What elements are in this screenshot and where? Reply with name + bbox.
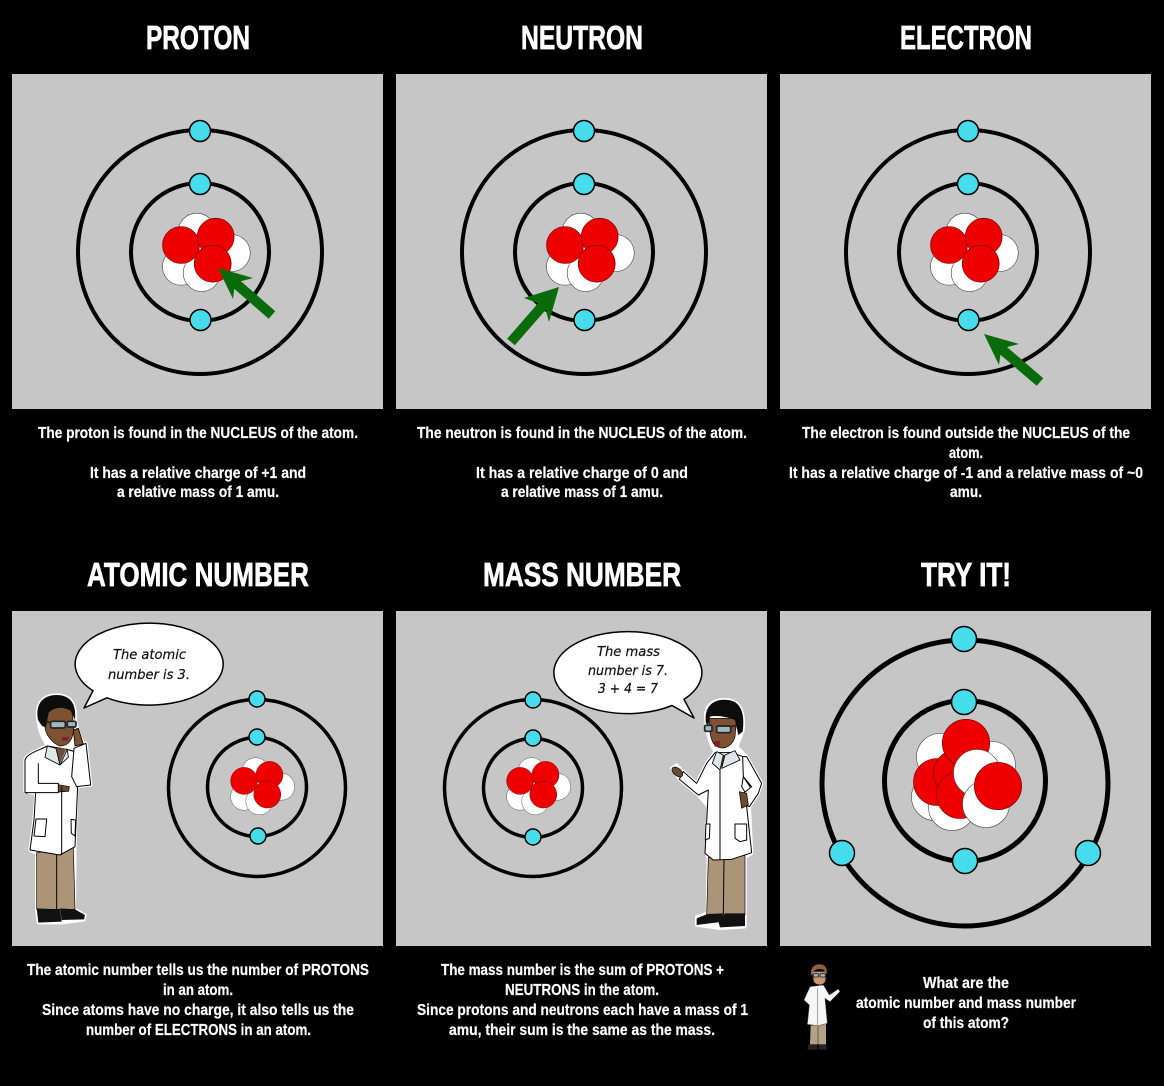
heading: neutron: NEUTRON <box>521 19 643 56</box>
text block: Since atoms have no charge, it also tells us the <box>42 1002 354 1019</box>
character: small scientist <box>804 964 840 1050</box>
text block: in an atom. <box>163 982 233 999</box>
speech bubble: The atomic <box>113 648 186 663</box>
illustration background <box>396 611 767 946</box>
text block: The proton is found in the NUCLEUS of the atom. <box>38 425 358 442</box>
atom diagram <box>462 120 706 374</box>
panel: electron <box>780 19 1151 501</box>
atom diagram <box>822 626 1108 926</box>
atom diagram <box>168 691 346 876</box>
character: scientist on the right <box>670 700 762 928</box>
text block <box>27 962 369 1039</box>
panel: mass number <box>396 556 767 1039</box>
atom diagram <box>846 120 1090 374</box>
heading: atomic number: ATOMIC NUMBER <box>87 556 309 593</box>
text block: The neutron is found in the NUCLEUS of the atom. <box>417 425 747 442</box>
speech bubble: The mass <box>597 645 660 660</box>
panel: proton <box>12 19 383 501</box>
text block: The atomic number tells us the number of PROTONS <box>27 962 369 979</box>
panel: try it <box>780 556 1151 1050</box>
arrow: points to neutron <box>507 287 559 345</box>
atom diagram <box>444 692 622 876</box>
panel: neutron <box>396 19 767 501</box>
text block <box>417 425 747 501</box>
text block <box>417 962 748 1039</box>
text block: Since protons and neutrons each have a mass of 1 <box>417 1002 748 1019</box>
text block: It has a relative charge of +1 and <box>90 465 306 482</box>
heading: mass number: MASS NUMBER <box>483 556 681 593</box>
question text: of this atom? <box>923 1015 1009 1032</box>
text block <box>789 425 1143 501</box>
arrow: points to proton <box>218 268 275 319</box>
speech bubble <box>75 623 223 708</box>
speech bubble <box>554 632 702 718</box>
heading: proton: PROTON <box>146 19 250 56</box>
text block: number of ELECTRONS in an atom. <box>86 1022 311 1039</box>
speech bubble: 3 + 4 = 7 <box>598 682 659 697</box>
text block: NEUTRONS in the atom. <box>505 982 659 999</box>
arrow: points to electron <box>984 334 1043 386</box>
text block: amu, their sum is the same as the mass. <box>449 1022 715 1039</box>
heading: electron: ELECTRON <box>900 19 1032 56</box>
question text: What are the <box>923 975 1009 992</box>
heading: try it: TRY IT! <box>921 556 1011 593</box>
text block: It has a relative charge of 0 and <box>476 465 688 482</box>
panel: atomic number <box>12 556 383 1039</box>
text block <box>38 425 358 501</box>
question text <box>856 975 1076 1032</box>
text block: a relative mass of 1 amu. <box>117 484 279 501</box>
illustration background <box>12 611 383 946</box>
illustration background <box>780 74 1151 409</box>
speech bubble: number is 7. <box>588 664 668 679</box>
speech bubble: number is 3. <box>108 668 190 683</box>
text block: atom. <box>949 445 983 462</box>
illustration background <box>396 74 767 409</box>
text block: amu. <box>950 484 982 501</box>
illustration background <box>780 611 1151 946</box>
illustration background <box>12 74 383 409</box>
atom diagram <box>78 120 322 374</box>
text block: The mass number is the sum of PROTONS + <box>441 962 724 979</box>
character: scientist on the left <box>25 695 91 923</box>
text block: a relative mass of 1 amu. <box>501 484 663 501</box>
question text: atomic number and mass number <box>856 995 1076 1012</box>
